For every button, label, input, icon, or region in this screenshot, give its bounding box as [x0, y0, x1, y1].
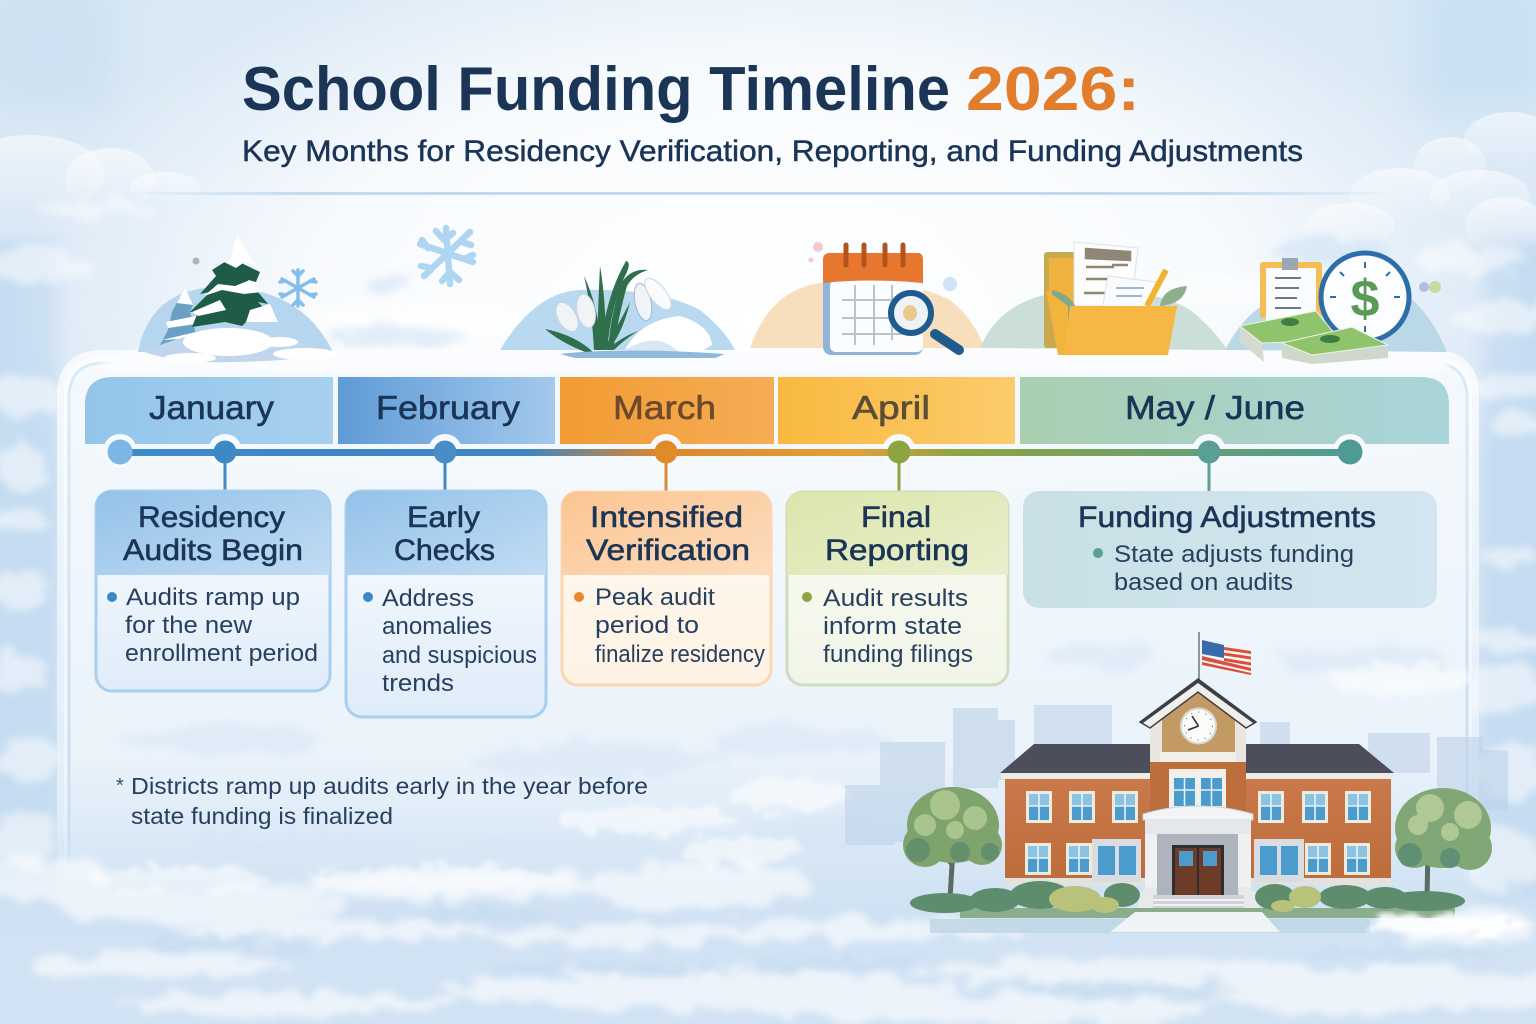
card: March Intensified Verification: Verification	[586, 534, 750, 567]
title: School Funding Timeline	[242, 55, 950, 124]
icon: clock tower face	[1181, 708, 1216, 744]
card: February Early Checks: anomalies	[382, 613, 492, 640]
card: May / June Funding Adjustments: Funding Adjustments	[1078, 501, 1376, 534]
icon: small snowflake	[280, 270, 316, 306]
card: March Intensified Verification: period to	[595, 612, 699, 639]
card: April Final Reporting: inform state	[823, 613, 962, 640]
card: January Residency Audits Begin: for the new	[125, 612, 253, 639]
month: January: January	[149, 389, 275, 426]
tree: right	[1395, 788, 1492, 897]
card: January Residency Audits Begin: Audits ramp up	[126, 584, 300, 611]
card: April Final Reporting: Audit results	[823, 585, 968, 612]
title: 2026:	[966, 55, 1140, 124]
icon: folder with papers and pencil	[980, 242, 1227, 355]
footnote	[116, 773, 648, 829]
bottom clouds	[0, 858, 1536, 1024]
card: April Final Reporting: Final	[861, 501, 931, 534]
month: April	[778, 377, 1015, 444]
entrance portico	[1138, 806, 1259, 912]
timeline with nodes and connectors	[103, 434, 1367, 492]
school building illustration	[903, 632, 1530, 935]
main timeline panel	[64, 357, 1472, 894]
month: January	[85, 377, 333, 444]
month: May / June: May / June	[1125, 389, 1305, 426]
lower windows	[1025, 839, 1370, 882]
card: January Residency Audits Begin: enrollment period	[125, 640, 318, 667]
card: March Intensified Verification: finalize residency	[595, 641, 765, 668]
card: May / June Funding Adjustments	[1023, 491, 1437, 608]
icon: snowy pine trees on a blue hill	[138, 235, 337, 363]
card: January Residency Audits Begin: Residency	[138, 501, 285, 534]
card: March Intensified Verification: Peak audit	[595, 584, 715, 611]
footnote: *	[116, 775, 124, 797]
month: February	[338, 377, 555, 444]
footnote: state funding is finalized	[131, 803, 393, 829]
icon: large snowflake	[420, 228, 473, 284]
card: February Early Checks: Early	[407, 501, 480, 534]
subtitle: Key Months for Residency Verification, Reporting, and Funding Adjustments	[242, 135, 1303, 168]
icon: clock, clipboard and money	[1225, 253, 1447, 364]
month: March	[560, 377, 774, 444]
bushes and lawn	[910, 881, 1530, 935]
card: February Early Checks: Address	[382, 585, 474, 612]
snow ledge above panel	[90, 349, 1450, 370]
card: February Early Checks	[346, 491, 546, 717]
card: March Intensified Verification: Intensified	[590, 501, 743, 534]
card: May / June Funding Adjustments: State adjusts funding	[1114, 541, 1354, 568]
card: January Residency Audits Begin	[96, 491, 330, 691]
card: May / June Funding Adjustments: based on audits	[1114, 569, 1293, 596]
month: March: March	[613, 389, 716, 426]
card: April Final Reporting: funding filings	[823, 641, 973, 668]
icon: American flag	[1198, 632, 1251, 680]
upper windows	[1026, 769, 1371, 823]
month: February: February	[376, 389, 521, 426]
card: February Early Checks: and suspicious	[382, 642, 537, 669]
card: April Final Reporting: Reporting	[825, 534, 969, 567]
icon: calendar with magnifying glass	[750, 242, 984, 355]
icon: snowdrop flowers on a blue hill	[500, 261, 735, 358]
card: February Early Checks: trends	[382, 670, 454, 697]
card: January Residency Audits Begin: Audits Begin	[123, 534, 303, 567]
tree: left	[903, 787, 1002, 898]
month: May / June	[1020, 377, 1449, 444]
month: April: April	[852, 389, 930, 426]
distant city skyline	[845, 705, 1508, 845]
icon: clock, clipboard and money: $	[1351, 270, 1380, 328]
card: April Final Reporting	[787, 492, 1008, 685]
card: March Intensified Verification	[562, 492, 771, 685]
month header bar	[85, 377, 1449, 444]
footnote: Districts ramp up audits early in the year before	[131, 773, 648, 799]
card: February Early Checks: Checks	[394, 534, 495, 567]
